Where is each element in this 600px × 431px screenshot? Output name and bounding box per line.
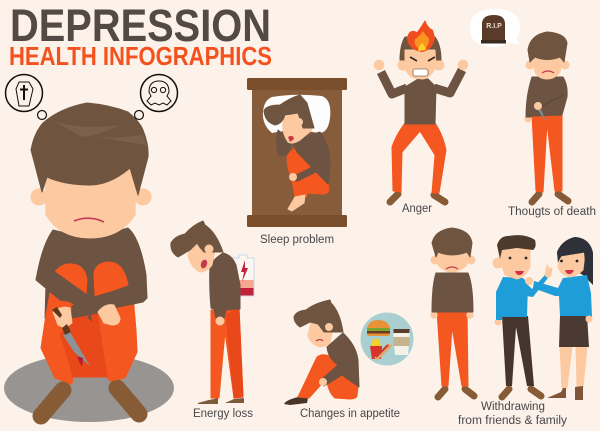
arms — [381, 70, 462, 94]
hanging hand — [525, 116, 531, 122]
changes in appetite: crouching man with food — [284, 300, 414, 405]
label: withdrawing from friends and family — [458, 401, 567, 427]
fries and hot dog — [370, 346, 382, 359]
ears — [398, 60, 408, 70]
legs — [392, 123, 446, 193]
arm under head — [277, 130, 292, 156]
face — [308, 322, 333, 347]
face — [45, 170, 136, 238]
hand — [216, 317, 224, 325]
shoes — [438, 389, 474, 397]
legs — [502, 316, 534, 386]
torso — [210, 253, 240, 318]
label: withdrawing from friends and family: from friends & family — [458, 415, 567, 427]
torso — [322, 333, 359, 387]
side hair — [400, 37, 441, 60]
back hair — [557, 237, 593, 285]
label: anger: Anger — [402, 203, 432, 215]
thought bubble: coffin — [6, 74, 46, 120]
hair — [497, 235, 536, 259]
label: sleep problem: Sleep problem — [260, 234, 334, 246]
label: thoughts of death: Thougts of death — [508, 206, 596, 218]
face — [437, 252, 468, 272]
ears — [526, 61, 534, 69]
title — [9, 0, 272, 71]
label: changes in appetite: Changes in appetite — [300, 408, 400, 420]
shoe — [284, 397, 308, 405]
face — [283, 114, 312, 143]
knees — [55, 262, 128, 297]
hands — [526, 278, 532, 284]
hair — [432, 228, 472, 257]
crossed arms — [36, 272, 100, 313]
foot — [288, 195, 305, 211]
speech bubble with RIP tombstone — [470, 9, 520, 47]
torso and arms — [526, 77, 567, 117]
hair — [528, 32, 567, 62]
hand — [495, 319, 501, 325]
thigh — [327, 372, 358, 399]
brows — [410, 57, 435, 61]
face — [188, 244, 215, 272]
knife — [63, 332, 90, 366]
hair — [31, 103, 148, 195]
floor shadow — [4, 354, 174, 422]
burger — [367, 320, 390, 328]
hands — [431, 312, 437, 318]
shoes — [502, 389, 541, 397]
food circle — [360, 312, 414, 366]
heels — [547, 386, 583, 400]
coffee cup — [393, 331, 410, 355]
back slivers — [45, 285, 134, 318]
face — [493, 258, 503, 268]
face — [405, 50, 436, 79]
withdrawing: lone man — [431, 228, 475, 397]
thoughts of death: standing man with knife — [525, 32, 569, 202]
anger: man with flame head — [374, 20, 468, 202]
body — [292, 132, 330, 184]
open mouth — [200, 259, 208, 269]
legs — [211, 308, 243, 398]
torso — [432, 273, 473, 312]
legs — [532, 114, 562, 192]
subtitle: HEALTH INFOGRAPHICS — [9, 43, 272, 71]
torso — [405, 79, 436, 124]
ears — [31, 189, 47, 205]
hair — [171, 221, 223, 257]
fringe — [557, 237, 593, 262]
shoes — [41, 388, 139, 416]
bed — [252, 89, 342, 215]
tombstone text: R.I.P — [486, 23, 502, 30]
hand and knife — [534, 102, 542, 110]
main figure: seated depressed man with knife — [4, 103, 174, 422]
raised arm — [526, 275, 548, 297]
hair — [264, 95, 314, 128]
fists — [374, 60, 384, 70]
body — [496, 277, 528, 320]
friend: woman in blue — [526, 237, 593, 400]
hands — [98, 305, 120, 325]
shoes — [198, 398, 244, 404]
ears — [431, 256, 439, 264]
forearm and hand — [297, 163, 327, 178]
lower legs — [41, 293, 137, 384]
pillow — [263, 95, 330, 133]
thought bubble: skull — [134, 74, 178, 120]
shoes — [532, 194, 568, 202]
shoes — [390, 194, 445, 202]
lower leg — [298, 355, 341, 398]
flame — [407, 20, 435, 52]
mouth — [413, 69, 428, 76]
face — [558, 253, 585, 277]
sad mouth — [74, 218, 104, 222]
legs — [437, 310, 468, 386]
legs — [287, 148, 329, 197]
sleep problem: bed with sleeping figure — [247, 78, 347, 227]
skirt — [559, 315, 589, 347]
label: withdrawing from friends and family: Withdrawing — [481, 401, 545, 413]
energy loss: stooped man with low battery — [171, 221, 254, 404]
legs — [560, 347, 587, 388]
torso — [36, 228, 147, 306]
body and arm — [533, 275, 592, 317]
battery — [233, 255, 254, 296]
face — [533, 57, 562, 79]
label: energy loss: Energy loss — [193, 408, 253, 420]
friend: man in blue — [493, 235, 552, 397]
title: DEPRESSION — [10, 0, 271, 51]
hair — [294, 300, 343, 332]
